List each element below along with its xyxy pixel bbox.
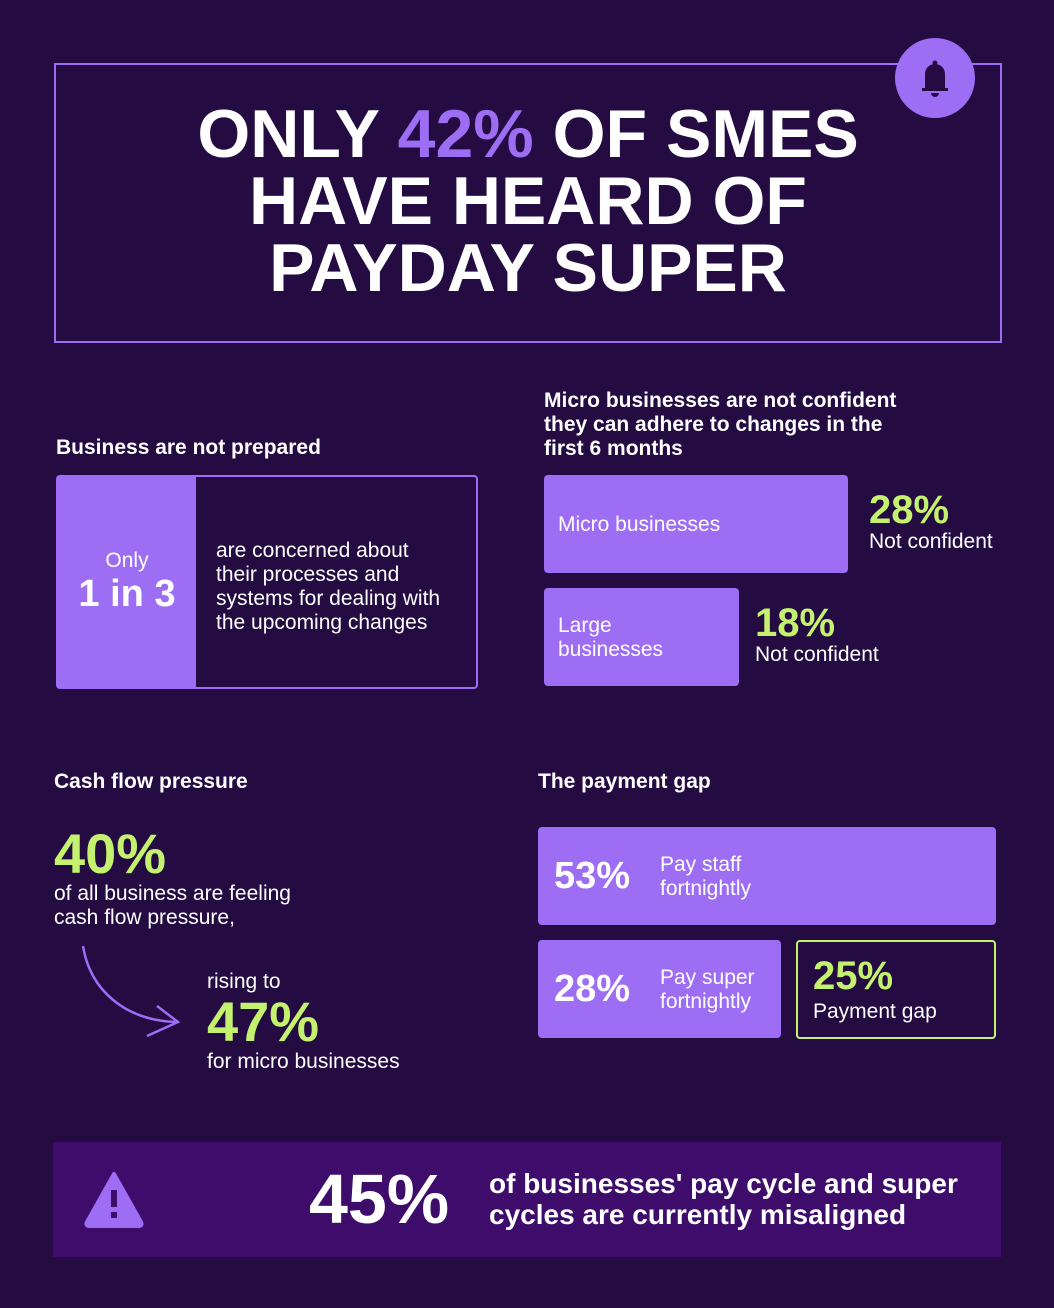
stat: 28%: Not confident (869, 530, 993, 553)
box: 25% gap (796, 940, 996, 1039)
text (489, 1168, 958, 1230)
stat: 47%: 47% (207, 990, 319, 1053)
heading: micro: first 6 months (544, 437, 683, 460)
box: 25% gap: Payment gap (813, 1000, 937, 1023)
bar: large: businesses (558, 638, 663, 661)
panel: not prepared (56, 475, 478, 689)
icon: warning (84, 1172, 144, 1228)
bar: large (544, 588, 739, 686)
bar: 53%: Pay staff (660, 853, 741, 876)
title (197, 96, 859, 306)
heading: micro (544, 389, 896, 460)
stat: 18% (755, 601, 879, 666)
bar: 53%: fortnightly (660, 877, 751, 900)
text: their processes and (216, 563, 399, 586)
title: HAVE HEARD OF (249, 163, 807, 239)
title panel (54, 63, 1002, 343)
bar: micro (544, 475, 848, 573)
bar: large: Large (558, 614, 612, 637)
stat: 45%: 45% (309, 1160, 449, 1238)
text: are concerned about (216, 539, 409, 562)
stat: 40%: 40% (54, 822, 166, 885)
title: PAYDAY SUPER (269, 230, 787, 306)
text: of businesses' pay cycle and super (489, 1168, 958, 1199)
heading: micro: they can adhere to changes in the (544, 413, 882, 436)
bar: micro: Micro businesses (558, 513, 720, 536)
bar: 28%: Pay super (660, 966, 755, 989)
heading: cash flow: Cash flow pressure (54, 770, 248, 793)
heading: micro: Micro businesses are not confident (544, 389, 896, 412)
bar: 28%: 28% (554, 968, 630, 1010)
text: systems for dealing with (216, 587, 440, 610)
box: 25% gap: 25% (813, 954, 893, 998)
bar: 53% (538, 827, 996, 925)
stat: 40% (54, 822, 291, 929)
stat: 18%: 18% (755, 601, 835, 645)
text: the upcoming changes (216, 611, 427, 634)
icon: bell (895, 38, 975, 118)
heading: not prepared: Business are not prepared (56, 436, 321, 459)
banner (53, 1142, 1001, 1257)
title: ONLY 42% OF SMES (197, 96, 859, 172)
stat: 1 in 3: Only (105, 549, 149, 572)
stat: 47%: for micro businesses (207, 1050, 400, 1073)
heading: payment gap: The payment gap (538, 770, 711, 793)
stat: 28% (869, 488, 993, 553)
stat: 28%: 28% (869, 488, 949, 532)
stat: 1 in 3 (58, 477, 196, 687)
stat: 40%: cash flow pressure, (54, 906, 235, 929)
stat: 40%: of all business are feeling (54, 882, 291, 905)
bar: 28% (538, 940, 781, 1038)
text: cycles are currently misaligned (489, 1199, 906, 1230)
stat: 18%: Not confident (755, 643, 879, 666)
stat: 47%: rising to (207, 970, 281, 993)
text (216, 539, 440, 634)
stat: 47% (207, 970, 400, 1073)
stat: 1 in 3: 1 in 3 (78, 573, 176, 615)
bar: 53%: 53% (554, 855, 630, 897)
arrow (82, 946, 180, 1038)
bar: 28%: fortnightly (660, 990, 751, 1013)
